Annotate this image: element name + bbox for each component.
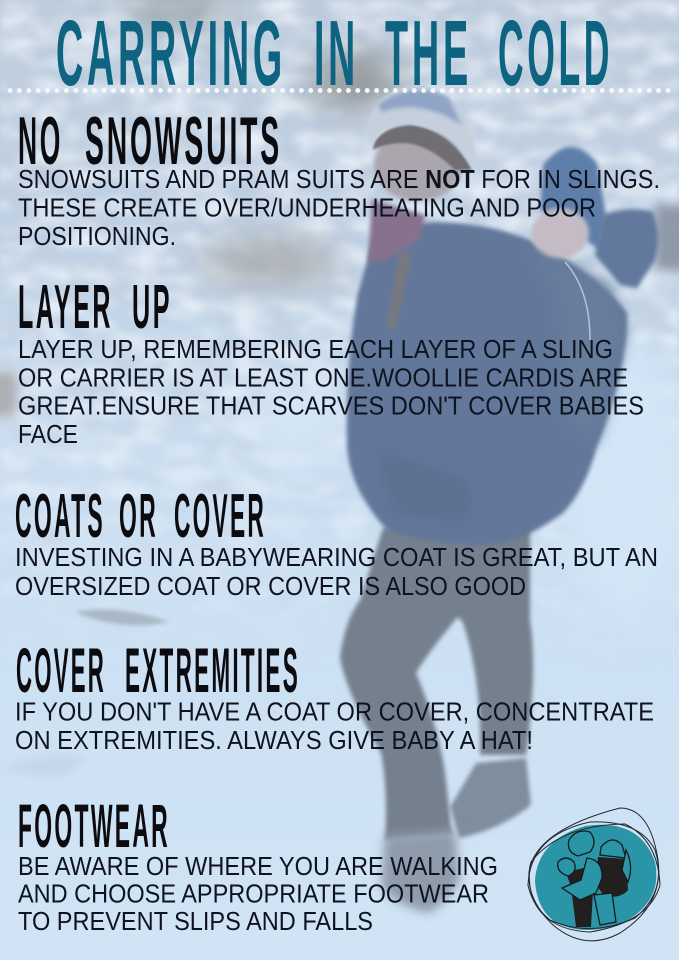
title: CARRYING [56,1,286,105]
text: layer up body [18,334,644,449]
text: footwear body: AND CHOOSE APPROPRIATE FOOTWEAR [18,878,489,908]
legs [340,520,533,840]
title: THE [385,1,472,105]
boots [450,758,531,838]
text: cover extremities body [15,696,654,755]
section: layer up [18,273,644,449]
title: IN [314,1,359,105]
heading: coats or cover: OR [119,482,158,551]
text: footwear body: TO PREVENT SLIPS AND FALLS [18,906,373,936]
text: no snowsuits body: THESE CREATE OVER/UNDERHEATING AND POOR [18,192,596,222]
text: footwear body: BE AWARE OF WHERE YOU ARE WALKING [18,851,498,881]
text: footwear body [18,851,498,936]
logo teal blob [535,825,656,930]
text: coats or cover body: OVERSIZED COAT OR COVER IS ALSO GOOD [15,571,526,601]
text: layer up body: FACE [18,419,78,449]
section: footwear [18,792,498,936]
section: layer up: UP [132,273,172,342]
text: layer up body: OR CARRIER IS AT LEAST ONE.WOOLLIE CARDIS ARE [18,362,628,392]
section: no snowsuits: SNOWSUITS [85,103,282,179]
text: no snowsuits body: POSITIONING. [18,221,176,251]
heading: layer up [18,273,172,342]
photo: woman carrying child [340,85,658,913]
text: no snowsuits body: SNOWSUITS AND PRAM SUITS ARE NOT FOR IN SLINGS. [18,164,660,194]
section: coats or cover [15,482,658,601]
section: footwear: FOOTWEAR [18,792,170,860]
heading: no snowsuits: NO [18,103,63,179]
section: coats or cover: COVER [174,482,266,551]
section: cover extremities [15,636,654,755]
text: coats or cover body [15,542,658,601]
heading: layer up: LAYER [18,273,113,342]
hat [367,85,478,162]
braid [386,250,412,330]
logo: babywearing circle [528,808,660,941]
section: cover extremities: EXTREMITIES [125,636,300,706]
heading: no snowsuits [18,103,282,179]
logo figures [566,857,628,927]
coat [347,222,627,545]
baby face [531,208,589,258]
logo scribble rings [528,808,660,941]
heading: cover extremities: COVER [16,636,106,706]
text: no snowsuits body [18,164,660,251]
text: cover extremities body: ON EXTREMITIES. ALWAYS GIVE BABY A HAT! [15,725,533,755]
zip line [565,262,590,340]
text: layer up body: LAYER UP, REMEMBERING EACH LAYER OF A SLING [18,334,613,364]
heading: coats or cover: COATS [15,482,105,551]
woman's face [374,129,462,201]
section: no snowsuits [18,103,660,251]
woman's scarf [368,200,425,262]
baby hood and sleeve [540,147,606,250]
dotted divider [10,88,672,93]
